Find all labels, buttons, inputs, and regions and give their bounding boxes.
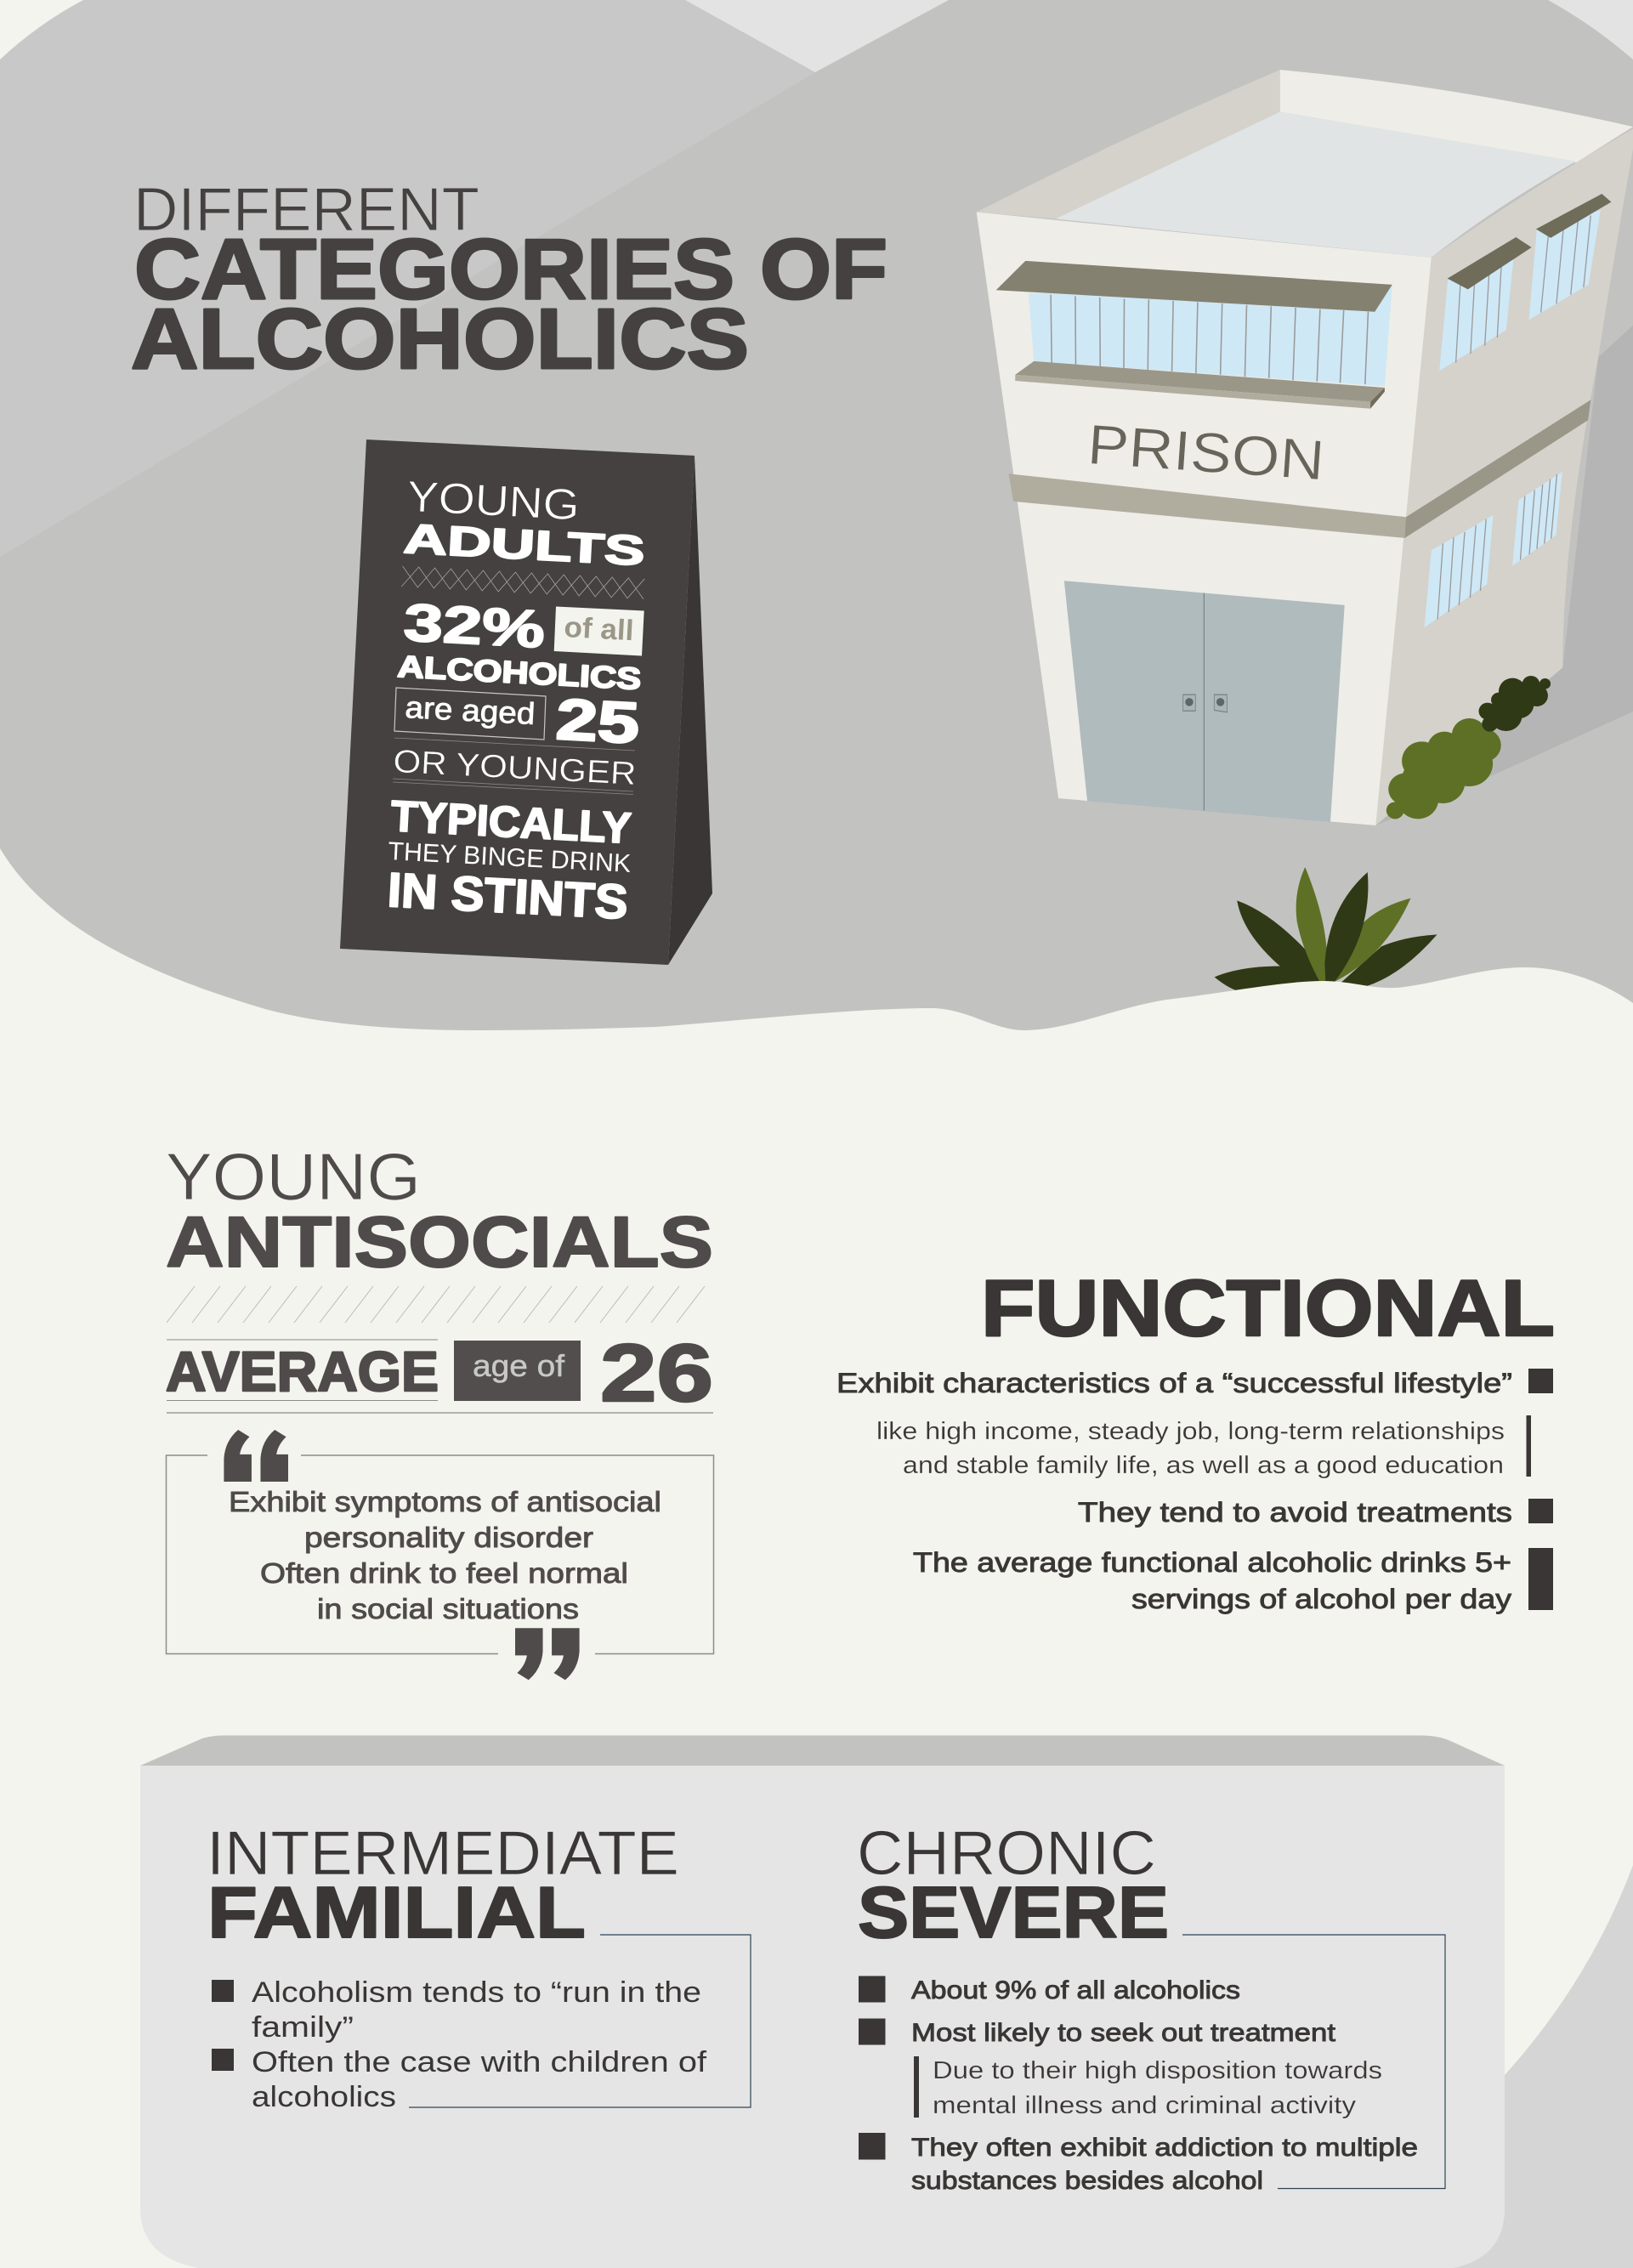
- sign: young adults: ALCOHOLICS: [397, 649, 642, 696]
- panel: chronic severe: CHRONIC: [857, 1819, 1156, 1888]
- title: ALCOHOLICS: [131, 292, 749, 387]
- sign: young adults: are aged: [405, 689, 536, 731]
- right wall: [1375, 128, 1633, 825]
- door: [1064, 581, 1345, 822]
- quote text: [229, 1486, 661, 1624]
- average label: AVERAGE: [166, 1340, 439, 1403]
- panel: intermediate familial: [207, 1819, 751, 2113]
- icon: opening quote: [224, 1430, 288, 1482]
- badge: are aged: [394, 688, 546, 740]
- sign: young adults: IN STINTS: [386, 863, 629, 930]
- roof: [977, 70, 1633, 258]
- badge: of all: [554, 607, 644, 656]
- quote text: Exhibit symptoms of antisocial: [229, 1486, 661, 1517]
- sign: young adults: ADULTS: [402, 516, 646, 575]
- sign: young adults: [340, 439, 712, 965]
- bottom panel: [140, 1736, 1505, 2268]
- panel: chronic severe: mental illness and criminal activity: [933, 2092, 1357, 2119]
- heading: ANTISOCIALS: [166, 1202, 713, 1282]
- sub-item: lifestyle details: and stable family life, as well as a good education: [903, 1452, 1504, 1479]
- item: servings per day: [913, 1547, 1553, 1614]
- quote text: Often drink to feel normal: [260, 1557, 628, 1589]
- title: DIFFERENT: [133, 176, 479, 244]
- panel: intermediate familial: FAMILIAL: [207, 1873, 586, 1953]
- sub-item: lifestyle details: [876, 1415, 1531, 1479]
- sign: young adults: TYPICALLY: [389, 791, 632, 853]
- panel: chronic severe: They often exhibit addiction to multiple: [911, 2134, 1418, 2162]
- badge: age of: age of: [473, 1348, 565, 1383]
- panel: chronic severe: Most likely to seek out treatment: [911, 2019, 1336, 2047]
- title: [131, 176, 887, 387]
- sign: young adults: 25: [554, 687, 641, 756]
- young antisocials section: [166, 1139, 714, 1680]
- panel: chronic severe: [857, 1819, 1445, 2195]
- panel: chronic severe: Due to their high disposition towards: [933, 2057, 1382, 2084]
- bush: light green: [1386, 718, 1501, 819]
- panel: chronic severe: About 9% of all alcoholics: [911, 1976, 1240, 2004]
- item: successful lifestyle: Exhibit characteristics of a “successful lifestyle”: [836, 1368, 1512, 1398]
- title: CATEGORIES OF: [134, 222, 887, 317]
- heading: FUNCTIONAL: [981, 1263, 1555, 1352]
- item: servings per day: servings of alcohol per day: [1131, 1584, 1511, 1614]
- building shadow: [1375, 326, 1633, 825]
- panel: intermediate familial: family”: [252, 2011, 354, 2044]
- quote text: in social situations: [317, 1593, 579, 1624]
- sub-item: lifestyle details: like high income, steady job, long-term relationships: [876, 1418, 1505, 1445]
- sign: young adults: OR YOUNGER: [393, 744, 637, 792]
- panel: chronic severe: SEVERE: [858, 1873, 1169, 1953]
- heading: YOUNG: [166, 1139, 421, 1214]
- front window: [996, 261, 1392, 409]
- badge: age of: [454, 1341, 581, 1401]
- panel: intermediate familial: Alcoholism tends to “run in the: [252, 1976, 701, 2009]
- sign: young adults: of all: [564, 611, 634, 647]
- prison building: [977, 70, 1633, 825]
- item: servings per day: The average functional alcoholic drinks 5+: [913, 1547, 1511, 1578]
- panel: intermediate familial: Often the case with children of: [252, 2046, 707, 2078]
- quote frame: [167, 1455, 714, 1654]
- cream ground: [0, 848, 1633, 2268]
- functional section: [836, 1263, 1555, 1614]
- sign: young adults: THEY BINGE DRINK: [388, 837, 632, 878]
- front wall: [977, 213, 1432, 825]
- panel: intermediate familial: INTERMEDIATE: [207, 1819, 679, 1888]
- heading: [166, 1139, 713, 1282]
- sign: young adults: 32%: [402, 593, 547, 660]
- age number: 26: [600, 1328, 713, 1419]
- lower right hill: [1437, 1865, 1633, 2268]
- prison label: PRISON: [1086, 412, 1327, 491]
- panel: chronic severe: substances besides alcohol: [911, 2167, 1263, 2195]
- floor band: [1008, 400, 1590, 538]
- plant leaves: [1215, 867, 1437, 992]
- bush: dark green: [1479, 676, 1551, 732]
- icon: closing quote: [515, 1628, 580, 1680]
- bushes and plant: [1215, 676, 1551, 992]
- item: avoid treatments: They tend to avoid treatments: [1078, 1497, 1512, 1528]
- quote text: personality disorder: [304, 1522, 593, 1553]
- sign: young adults: YOUNG: [405, 472, 581, 530]
- lattice ornament: [401, 566, 644, 599]
- side windows: [1424, 194, 1611, 627]
- panel: intermediate familial: alcoholics: [252, 2081, 396, 2113]
- background hills: [0, 0, 1633, 1105]
